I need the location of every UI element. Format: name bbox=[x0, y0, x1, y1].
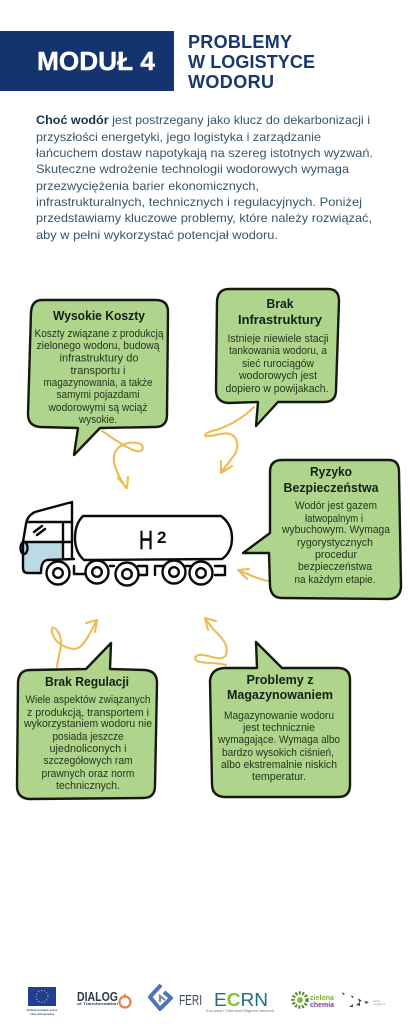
logo: European Union: Dofinansowane przez bbox=[27, 1008, 58, 1012]
module banner: MODUŁ 4 bbox=[37, 46, 156, 76]
logo: ECRN bbox=[206, 990, 274, 1013]
panel: high costs: Koszty związane z produkcją bbox=[34, 328, 164, 340]
panel: high costs: Wysokie Koszty bbox=[53, 308, 146, 323]
logo: zielona chemia: chemia bbox=[310, 1002, 334, 1009]
logo: Dialog of Transformation: DIALOG bbox=[77, 990, 118, 1004]
arrow: safety to truck bbox=[238, 569, 268, 581]
tank bbox=[75, 516, 232, 560]
logo: FERI: FERI bbox=[179, 992, 202, 1009]
panel: safety risk: na każdym etapie. bbox=[294, 574, 376, 586]
panel: storage problems: jest technicznie bbox=[242, 722, 315, 734]
intro paragraph: infrastrukturalnych, technicznych i regulacyjnych. Poniżej bbox=[36, 195, 362, 209]
panel: safety risk: Wodór jest gazem bbox=[295, 500, 377, 512]
arrow: infrastructure to truck bbox=[205, 407, 254, 473]
title bbox=[188, 32, 315, 92]
panel: safety risk: wybuchowym. Wymaga bbox=[281, 524, 390, 536]
panel: missing infrastructure: Istnieje niewiele stacji bbox=[228, 333, 328, 345]
panel: high costs: zielonego wodoru, budową bbox=[36, 340, 160, 352]
panel: missing infrastructure: tankowania wodoru, a bbox=[229, 345, 327, 357]
intro paragraph bbox=[36, 113, 373, 242]
tank label: H bbox=[139, 525, 153, 555]
panel: lack of regulation bbox=[17, 643, 157, 799]
panel: high costs: transportu i bbox=[70, 365, 126, 377]
panel: high costs: infrastruktury do bbox=[60, 352, 139, 364]
panel: storage problems: temperatur. bbox=[252, 771, 306, 783]
panel: storage problems: Magazynowanie wodoru bbox=[224, 710, 334, 722]
panel: missing infrastructure: dopiero w powijakach. bbox=[226, 383, 328, 395]
panel: safety risk: procedur bbox=[315, 549, 357, 561]
panel: safety risk: Bezpieczeństwa bbox=[284, 480, 379, 495]
panel: missing infrastructure: wodorowych jest bbox=[238, 370, 317, 382]
panel: missing infrastructure: sieć rurociągów bbox=[242, 358, 314, 370]
logo: birds: wodór bbox=[373, 1000, 380, 1003]
logo: FERI bbox=[150, 985, 202, 1009]
chassis bbox=[74, 566, 225, 575]
panel: high costs: wodorowymi są wciąż bbox=[48, 402, 148, 414]
panel: lack of regulation: ujednoliconych i bbox=[50, 743, 126, 755]
intro paragraph: łańcuchem dostaw napotykają na szereg istotnych wyzwań. bbox=[36, 146, 373, 160]
panel: lack of regulation: Wiele aspektów związanych bbox=[26, 694, 151, 706]
panel: lack of regulation: z produkcją, transportem i bbox=[27, 707, 149, 719]
logo: birds: w logistyce bbox=[373, 1003, 386, 1006]
title: PROBLEMY bbox=[188, 32, 292, 52]
title: WODORU bbox=[188, 72, 274, 92]
arrow: storage to truck bbox=[195, 618, 227, 665]
panel: storage problems: Problemy z bbox=[246, 672, 314, 687]
logo: ECRN: ECRN bbox=[214, 990, 268, 1010]
logo: zielona chemia: zielona bbox=[310, 995, 334, 1002]
panel: storage problems: bardzo wysokich ciśnień, bbox=[222, 747, 334, 759]
wheels bbox=[46, 560, 212, 586]
panel: safety risk: Ryzyko bbox=[310, 464, 352, 479]
truck body outline bbox=[23, 502, 74, 573]
panel: safety risk bbox=[243, 460, 401, 599]
panel: lack of regulation: posiada jeszcze bbox=[52, 731, 124, 743]
panel: missing infrastructure bbox=[216, 289, 339, 426]
intro paragraph: przedstawiamy kluczowe problemy, które należy rozwiązać, bbox=[36, 211, 372, 225]
title: W LOGISTYCE bbox=[188, 52, 315, 72]
logo: European Union bbox=[27, 987, 58, 1016]
panel: safety risk: rygorystycznych bbox=[297, 537, 373, 549]
panel: high costs: wysokie. bbox=[78, 414, 117, 426]
panel: storage problems: wymagające. Wymaga albo bbox=[217, 734, 340, 746]
panel: storage problems: Magazynowaniem bbox=[227, 687, 333, 702]
logo: Dialog of Transformation: of Transformation bbox=[77, 1001, 119, 1006]
panel: missing infrastructure: Brak bbox=[266, 296, 294, 311]
panel: lack of regulation: szczegółowych ram bbox=[44, 755, 133, 767]
panel: safety risk: bezpieczeństwa bbox=[298, 561, 372, 573]
panel: lack of regulation: technicznych. bbox=[56, 780, 120, 792]
logo: birds bbox=[342, 992, 386, 1007]
panel: lack of regulation: wykorzystaniem wodoru nie bbox=[23, 718, 152, 730]
intro paragraph: przyszłości energetyki, jego logistyka i zarządzanie bbox=[36, 130, 321, 144]
icon: hydrogen tanker truck bbox=[20, 502, 232, 586]
arrow: regulation to truck bbox=[52, 620, 97, 667]
logo: ECRN: European Chemical Regions Network bbox=[206, 1009, 274, 1013]
intro paragraph: Choć wodór jest postrzegany jako klucz do dekarbonizacji i bbox=[36, 113, 370, 127]
panel: storage problems: albo ekstremalnie niskich bbox=[221, 759, 337, 771]
panel: high costs bbox=[28, 300, 168, 455]
panel: high costs: magazynowania, a także bbox=[44, 377, 153, 389]
intro paragraph: Skuteczne wdrożenie technologii wodorowych wymaga bbox=[36, 162, 349, 176]
logo: zielona chemia bbox=[293, 993, 334, 1009]
panel: storage problems bbox=[210, 642, 350, 797]
panel: safety risk: łatwopalnym i bbox=[305, 513, 363, 525]
panel: lack of regulation: Brak Regulacji bbox=[45, 674, 129, 689]
arrow: high costs to truck bbox=[102, 431, 143, 488]
panel: lack of regulation: prawnych oraz norm bbox=[42, 768, 135, 780]
truck headlight bbox=[20, 542, 28, 554]
intro paragraph: przezwyciężenia barier ekonomicznych, bbox=[36, 179, 259, 193]
truck cab window tint bbox=[23, 542, 63, 573]
panel: missing infrastructure: Infrastruktury bbox=[238, 312, 323, 327]
panel: high costs: samymi pojazdami bbox=[56, 389, 140, 401]
intro paragraph: aby w pełni wykorzystać potencjał wodoru. bbox=[36, 228, 278, 242]
module banner bbox=[0, 31, 174, 91]
icon: hydrogen tanker truck: 2 bbox=[157, 528, 166, 547]
logo: European Union: Unię Europejską bbox=[30, 1012, 54, 1016]
